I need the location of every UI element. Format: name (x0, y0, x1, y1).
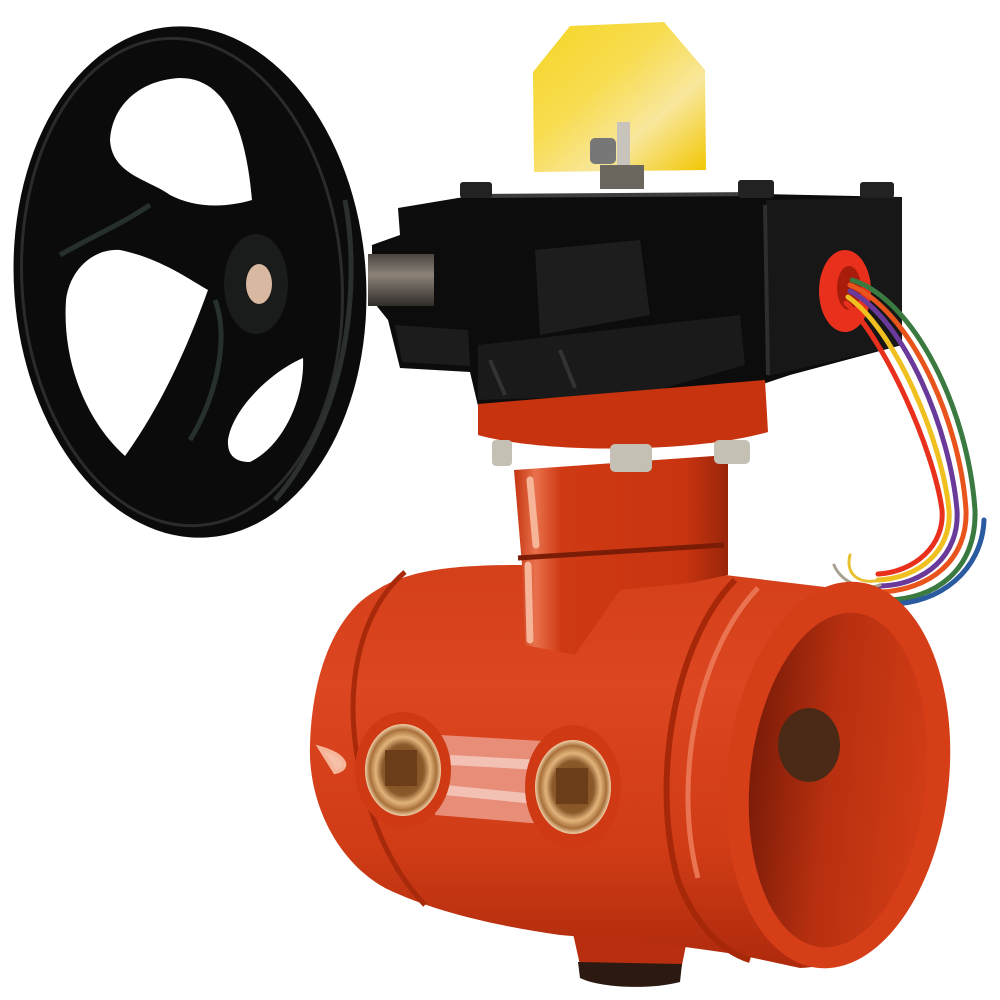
disc stem hole (778, 708, 840, 782)
handwheel (0, 14, 383, 550)
bronze plug left (365, 724, 441, 816)
wheel hub (224, 234, 288, 334)
drive shaft (368, 254, 434, 306)
valve body (310, 565, 969, 987)
neck bolts (492, 440, 750, 472)
wire bundle (834, 280, 984, 604)
drain plug (570, 920, 690, 987)
valve neck (478, 380, 768, 655)
gearbox (368, 180, 902, 406)
end opening rim (707, 570, 969, 980)
boss right (525, 725, 621, 849)
wire grommet (819, 250, 871, 332)
right groove (667, 580, 750, 960)
wheel opening: lower left (66, 250, 208, 456)
wheel opening: top (110, 78, 252, 205)
cylinder (310, 565, 949, 968)
bore (733, 604, 943, 956)
boss left (355, 712, 451, 828)
left rim highlight (320, 748, 344, 772)
boss bar (435, 735, 560, 825)
gearbox bolts (460, 180, 894, 198)
bronze plug right (535, 740, 611, 834)
wheel opening: lower right (228, 358, 303, 462)
left groove (353, 572, 425, 905)
indicator flag (533, 22, 706, 189)
